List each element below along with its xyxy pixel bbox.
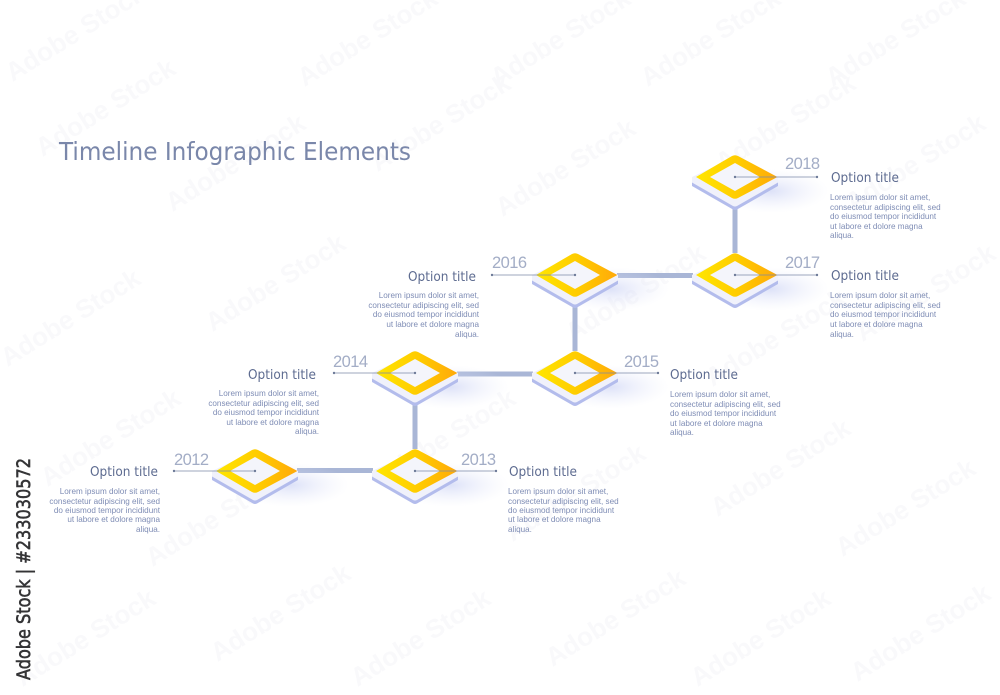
body text 2012: do eiusmod tempor incididunt	[54, 506, 161, 515]
stock id label: Adobe Stock | #233030572	[13, 458, 35, 680]
body text 2017: do eiusmod tempor incididunt	[830, 310, 937, 319]
body text 2016: consectetur adipiscing elit, sed	[368, 301, 479, 310]
watermark: Adobe Stock	[205, 557, 356, 667]
body text 2014: Lorem ipsum dolor sit amet,	[219, 389, 319, 398]
option title 2013: Option title	[509, 465, 577, 480]
watermark: Adobe Stock	[365, 67, 516, 177]
node 2018: 2018	[785, 155, 820, 173]
watermark: Adobe Stock	[140, 462, 291, 572]
option title 2016: Option title	[408, 270, 476, 285]
watermark: Adobe Stock	[560, 237, 711, 347]
watermark: Adobe Stock	[10, 582, 161, 692]
body text 2018: do eiusmod tempor incididunt	[830, 212, 937, 221]
node 2017: 2017	[785, 254, 820, 272]
body text 2013: do eiusmod tempor incididunt	[508, 506, 615, 515]
watermark: Adobe Stock	[710, 67, 861, 177]
watermark: Adobe Stock	[345, 582, 496, 692]
body text 2012: consectetur adipiscing elit, sed	[49, 497, 160, 506]
node 2016	[368, 253, 669, 339]
node 2014	[208, 351, 509, 436]
watermark: Adobe Stock	[840, 107, 991, 217]
body text 2016: Lorem ipsum dolor sit amet,	[379, 291, 479, 300]
watermark: Adobe Stock	[845, 577, 996, 687]
body text 2016: aliqua.	[455, 330, 479, 339]
body text 2018: ut labore et dolore magna	[830, 222, 923, 231]
body text 2012: Lorem ipsum dolor sit amet,	[60, 487, 160, 496]
watermark: Adobe Stock	[685, 582, 836, 692]
body text 2016: ut labore et dolore magna	[386, 320, 479, 329]
body text 2013: Lorem ipsum dolor sit amet,	[508, 487, 608, 496]
body text 2013: ut labore et dolore magna	[508, 515, 601, 524]
watermark: Adobe Stock	[830, 452, 981, 562]
watermark: Adobe Stock	[490, 112, 641, 222]
watermark: Adobe Stock	[200, 227, 351, 337]
body text 2015: Lorem ipsum dolor sit amet,	[670, 390, 770, 399]
body text 2015: ut labore et dolore magna	[670, 419, 763, 428]
watermark: Adobe Stock	[370, 382, 521, 492]
node 2012: 2012	[174, 451, 209, 469]
node 2013: 2013	[461, 451, 496, 469]
watermark: Adobe Stock	[540, 562, 691, 672]
body text 2015: consectetur adipiscing elit, sed	[670, 400, 781, 409]
node 2012	[49, 449, 349, 534]
watermark: Adobe Stock	[850, 237, 1000, 347]
body text 2012: ut labore et dolore magna	[67, 515, 160, 524]
body text 2018: consectetur adipiscing elit, sed	[830, 203, 941, 212]
body text 2018: Lorem ipsum dolor sit amet,	[830, 193, 930, 202]
watermark: Adobe Stock	[500, 437, 651, 547]
node 2014: 2014	[333, 353, 368, 371]
option title 2018: Option title	[831, 171, 899, 186]
option title 2017: Option title	[831, 269, 899, 284]
node 2015: 2015	[624, 353, 659, 371]
watermark: Adobe Stock	[160, 107, 311, 217]
body text 2016: do eiusmod tempor incididunt	[373, 310, 480, 319]
node 2016: 2016	[492, 254, 527, 272]
option title 2012: Option title	[90, 465, 158, 480]
node 2018	[692, 155, 941, 240]
body text 2015: aliqua.	[670, 428, 694, 437]
connectors	[297, 209, 738, 473]
title: Timeline Infographic Elements	[58, 137, 411, 166]
body text 2017: aliqua.	[830, 330, 854, 339]
body text 2013: aliqua.	[508, 525, 532, 534]
body text 2014: do eiusmod tempor incididunt	[213, 408, 320, 417]
body text 2018: aliqua.	[830, 231, 854, 240]
body text 2017: Lorem ipsum dolor sit amet,	[830, 291, 930, 300]
body text 2014: aliqua.	[295, 427, 319, 436]
watermark: Adobe Stock	[35, 382, 186, 492]
body text 2017: ut labore et dolore magna	[830, 320, 923, 329]
body text 2014: ut labore et dolore magna	[226, 418, 319, 427]
body text 2014: consectetur adipiscing elit, sed	[208, 399, 319, 408]
watermark: Adobe Stock	[705, 412, 856, 522]
node 2017	[692, 253, 941, 339]
body text 2012: aliqua.	[136, 525, 160, 534]
body text 2015: do eiusmod tempor incididunt	[670, 409, 777, 418]
option title 2014: Option title	[248, 368, 316, 383]
body text 2017: consectetur adipiscing elit, sed	[830, 301, 941, 310]
node 2013	[372, 449, 619, 534]
node 2015	[532, 351, 781, 437]
option title 2015: Option title	[670, 368, 738, 383]
watermark: Adobe Stock	[700, 282, 851, 392]
body text 2013: consectetur adipiscing elit, sed	[508, 497, 619, 506]
watermark: Adobe Stock	[30, 52, 181, 162]
